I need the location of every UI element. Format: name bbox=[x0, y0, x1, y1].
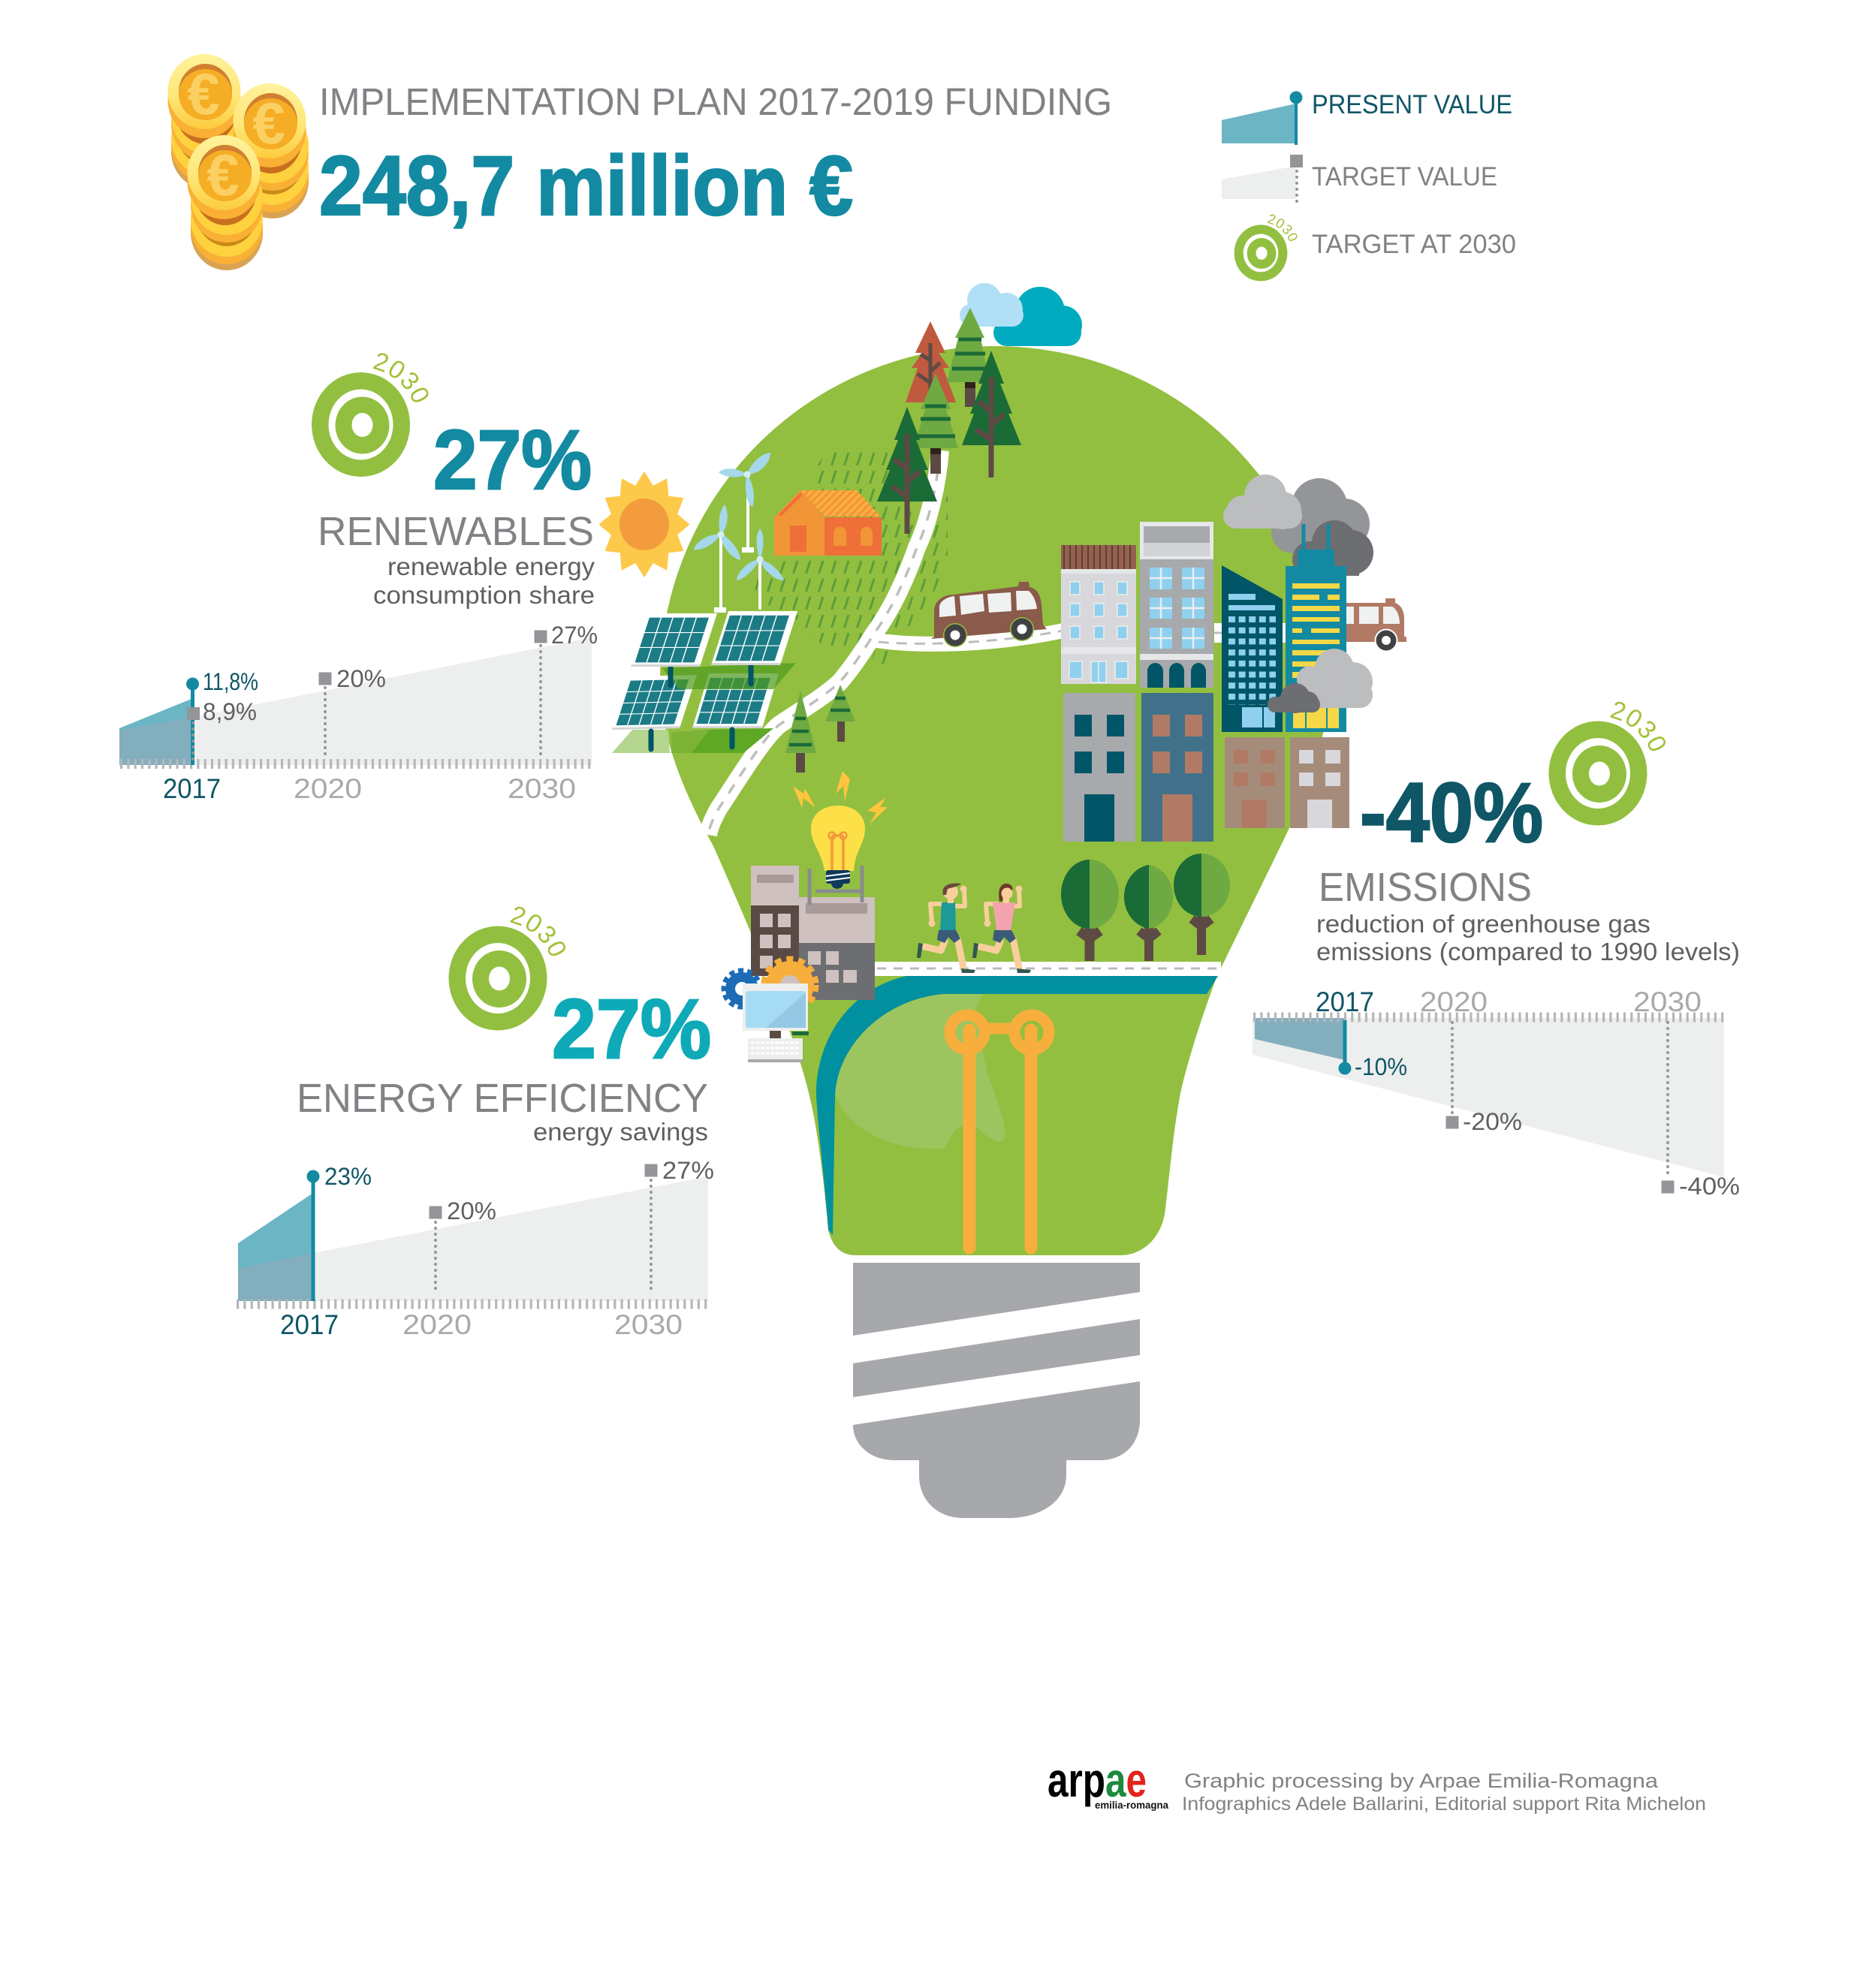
coin stack front: € bbox=[206, 142, 240, 208]
credits: Infographics Adele Ballarini, Editorial support Rita Michelon bbox=[1182, 1794, 1706, 1815]
runner: woman bbox=[972, 884, 1031, 973]
bus: behind towers bbox=[1340, 598, 1406, 652]
bulb: light reflection bbox=[835, 994, 1005, 1149]
logo: arpae: emilia-romagna bbox=[1095, 1799, 1168, 1811]
icon: solar panels bbox=[612, 611, 797, 753]
clouds behind city bbox=[1223, 474, 1373, 577]
building: brown lower left bbox=[1225, 737, 1285, 828]
legend: target 2030 label: TARGET AT 2030 bbox=[1312, 230, 1516, 259]
percentage: -40% bbox=[1360, 766, 1543, 860]
runner: man bbox=[917, 883, 975, 973]
area chart: 2020 bbox=[1420, 986, 1488, 1017]
target icon 2030: 2030 bbox=[372, 353, 428, 402]
icon: gears and computer bbox=[724, 959, 816, 1062]
area chart: 2030 bbox=[614, 1309, 683, 1340]
area chart: 2017 bbox=[163, 773, 221, 804]
subtitle: reduction of greenhouse gas bbox=[1316, 910, 1650, 938]
subtitle: renewable energy bbox=[387, 553, 595, 580]
heading: EMISSIONS bbox=[1319, 865, 1532, 910]
road: hill road bbox=[708, 450, 940, 835]
icon: sun bbox=[598, 471, 690, 578]
coin stack back left: € bbox=[187, 61, 220, 127]
legend: present value label: PRESENT VALUE bbox=[1312, 90, 1512, 119]
legend: target value label: TARGET VALUE bbox=[1312, 162, 1497, 191]
dark fir left bbox=[877, 407, 937, 534]
bulb: riverside path bbox=[875, 962, 1221, 976]
bus: brown bbox=[931, 582, 1047, 647]
building: blue lower bbox=[1141, 693, 1213, 842]
light fir 1 bbox=[947, 308, 989, 407]
panel: energy efficiency bbox=[237, 907, 714, 1340]
bulb: base screw bbox=[853, 1263, 1140, 1518]
coin stack front bbox=[188, 135, 263, 270]
area chart: 20% bbox=[336, 665, 386, 692]
icon: euro coin stacks bbox=[168, 54, 309, 270]
bulb: filament bbox=[950, 1015, 1049, 1248]
light fir 2 bbox=[914, 374, 958, 474]
percentage: 27% bbox=[552, 982, 711, 1076]
target icon 2030 bbox=[312, 353, 428, 477]
subtitle bbox=[1316, 910, 1740, 965]
coin stack back right bbox=[233, 83, 309, 218]
coin stack back left bbox=[168, 54, 243, 189]
credits: Graphic processing by Arpae Emilia-Romagna bbox=[1184, 1770, 1659, 1792]
trees by the river bbox=[1061, 854, 1230, 961]
area chart: 2017 bbox=[280, 1309, 339, 1340]
headline: funding amount: 248,7 million € bbox=[319, 139, 853, 233]
trees on hill bbox=[877, 308, 1021, 534]
bulb illustration bbox=[598, 283, 1406, 1518]
area chart: 27% bbox=[551, 622, 598, 649]
icon: small light bulb bbox=[793, 771, 888, 889]
heading: ENERGY EFFICIENCY bbox=[297, 1076, 708, 1121]
subtitle: energy savings bbox=[533, 1118, 708, 1146]
area chart: 23% bbox=[324, 1163, 372, 1190]
area chart bbox=[119, 622, 598, 804]
building: dark teal tower bbox=[1222, 565, 1283, 732]
subtitle bbox=[373, 553, 595, 609]
area chart: 2030 bbox=[1633, 986, 1702, 1017]
target icon 2030 bbox=[449, 907, 565, 1030]
title: implementation plan: IMPLEMENTATION PLAN 2017-2019 FUNDING bbox=[319, 80, 1112, 123]
percentage: 27% bbox=[433, 413, 592, 507]
heading: RENEWABLES bbox=[318, 509, 594, 554]
area chart: -40% bbox=[1679, 1173, 1740, 1200]
target icon 2030 bbox=[1548, 701, 1666, 826]
clouds top bbox=[960, 283, 1082, 346]
building: brown lower right bbox=[1290, 737, 1349, 828]
coin stack back right: € bbox=[252, 90, 285, 156]
target icon 2030: 2030 bbox=[510, 907, 565, 956]
building: blue tower with yellow stripes bbox=[1286, 524, 1346, 732]
icon: wind turbines bbox=[694, 453, 784, 613]
area chart: 2030 bbox=[508, 773, 576, 804]
icon: farmhouse bbox=[774, 490, 882, 556]
credits bbox=[1182, 1770, 1706, 1815]
panel: renewables bbox=[119, 353, 598, 804]
bulb: glass body bbox=[660, 346, 1330, 1255]
area chart: -10% bbox=[1355, 1053, 1407, 1080]
building: light grey with brown roof bbox=[1061, 545, 1136, 684]
area chart: 2020 bbox=[402, 1309, 472, 1340]
dark fir right bbox=[962, 351, 1021, 477]
subtitle: consumption share bbox=[373, 581, 595, 609]
area chart: 11,8% bbox=[203, 668, 258, 695]
bulb: river bbox=[816, 976, 1218, 1235]
building: grey with arches bbox=[1140, 522, 1213, 688]
icon: small firs bbox=[785, 685, 855, 773]
legend: present value swatch bbox=[1222, 92, 1302, 145]
area chart: 2020 bbox=[294, 773, 362, 804]
area chart: 27% bbox=[662, 1157, 714, 1184]
target icon 2030: 2030 bbox=[1610, 701, 1666, 751]
red tree bbox=[906, 321, 956, 402]
road: side road bbox=[873, 631, 1286, 644]
legend: target 2030 icon bbox=[1234, 215, 1298, 281]
legend: target value swatch bbox=[1222, 155, 1303, 203]
subtitle: emissions (compared to 1990 levels) bbox=[1316, 938, 1740, 965]
legend bbox=[1222, 90, 1516, 281]
logo: arpae: arpae bbox=[1048, 1753, 1147, 1807]
area chart: 20% bbox=[447, 1197, 496, 1224]
area chart: 8,9% bbox=[203, 698, 257, 725]
field rows bbox=[751, 450, 948, 667]
area chart: 2017 bbox=[1316, 986, 1374, 1017]
legend: target 2030 icon: 2030 bbox=[1268, 215, 1298, 241]
clouds in front of city bbox=[1268, 649, 1373, 713]
area chart bbox=[237, 1157, 714, 1340]
icon: factory bbox=[751, 866, 875, 1000]
panel: emissions bbox=[1253, 701, 1740, 1200]
building: grey lower bbox=[1063, 693, 1135, 842]
area chart bbox=[1253, 986, 1740, 1200]
area chart: -20% bbox=[1463, 1108, 1522, 1135]
